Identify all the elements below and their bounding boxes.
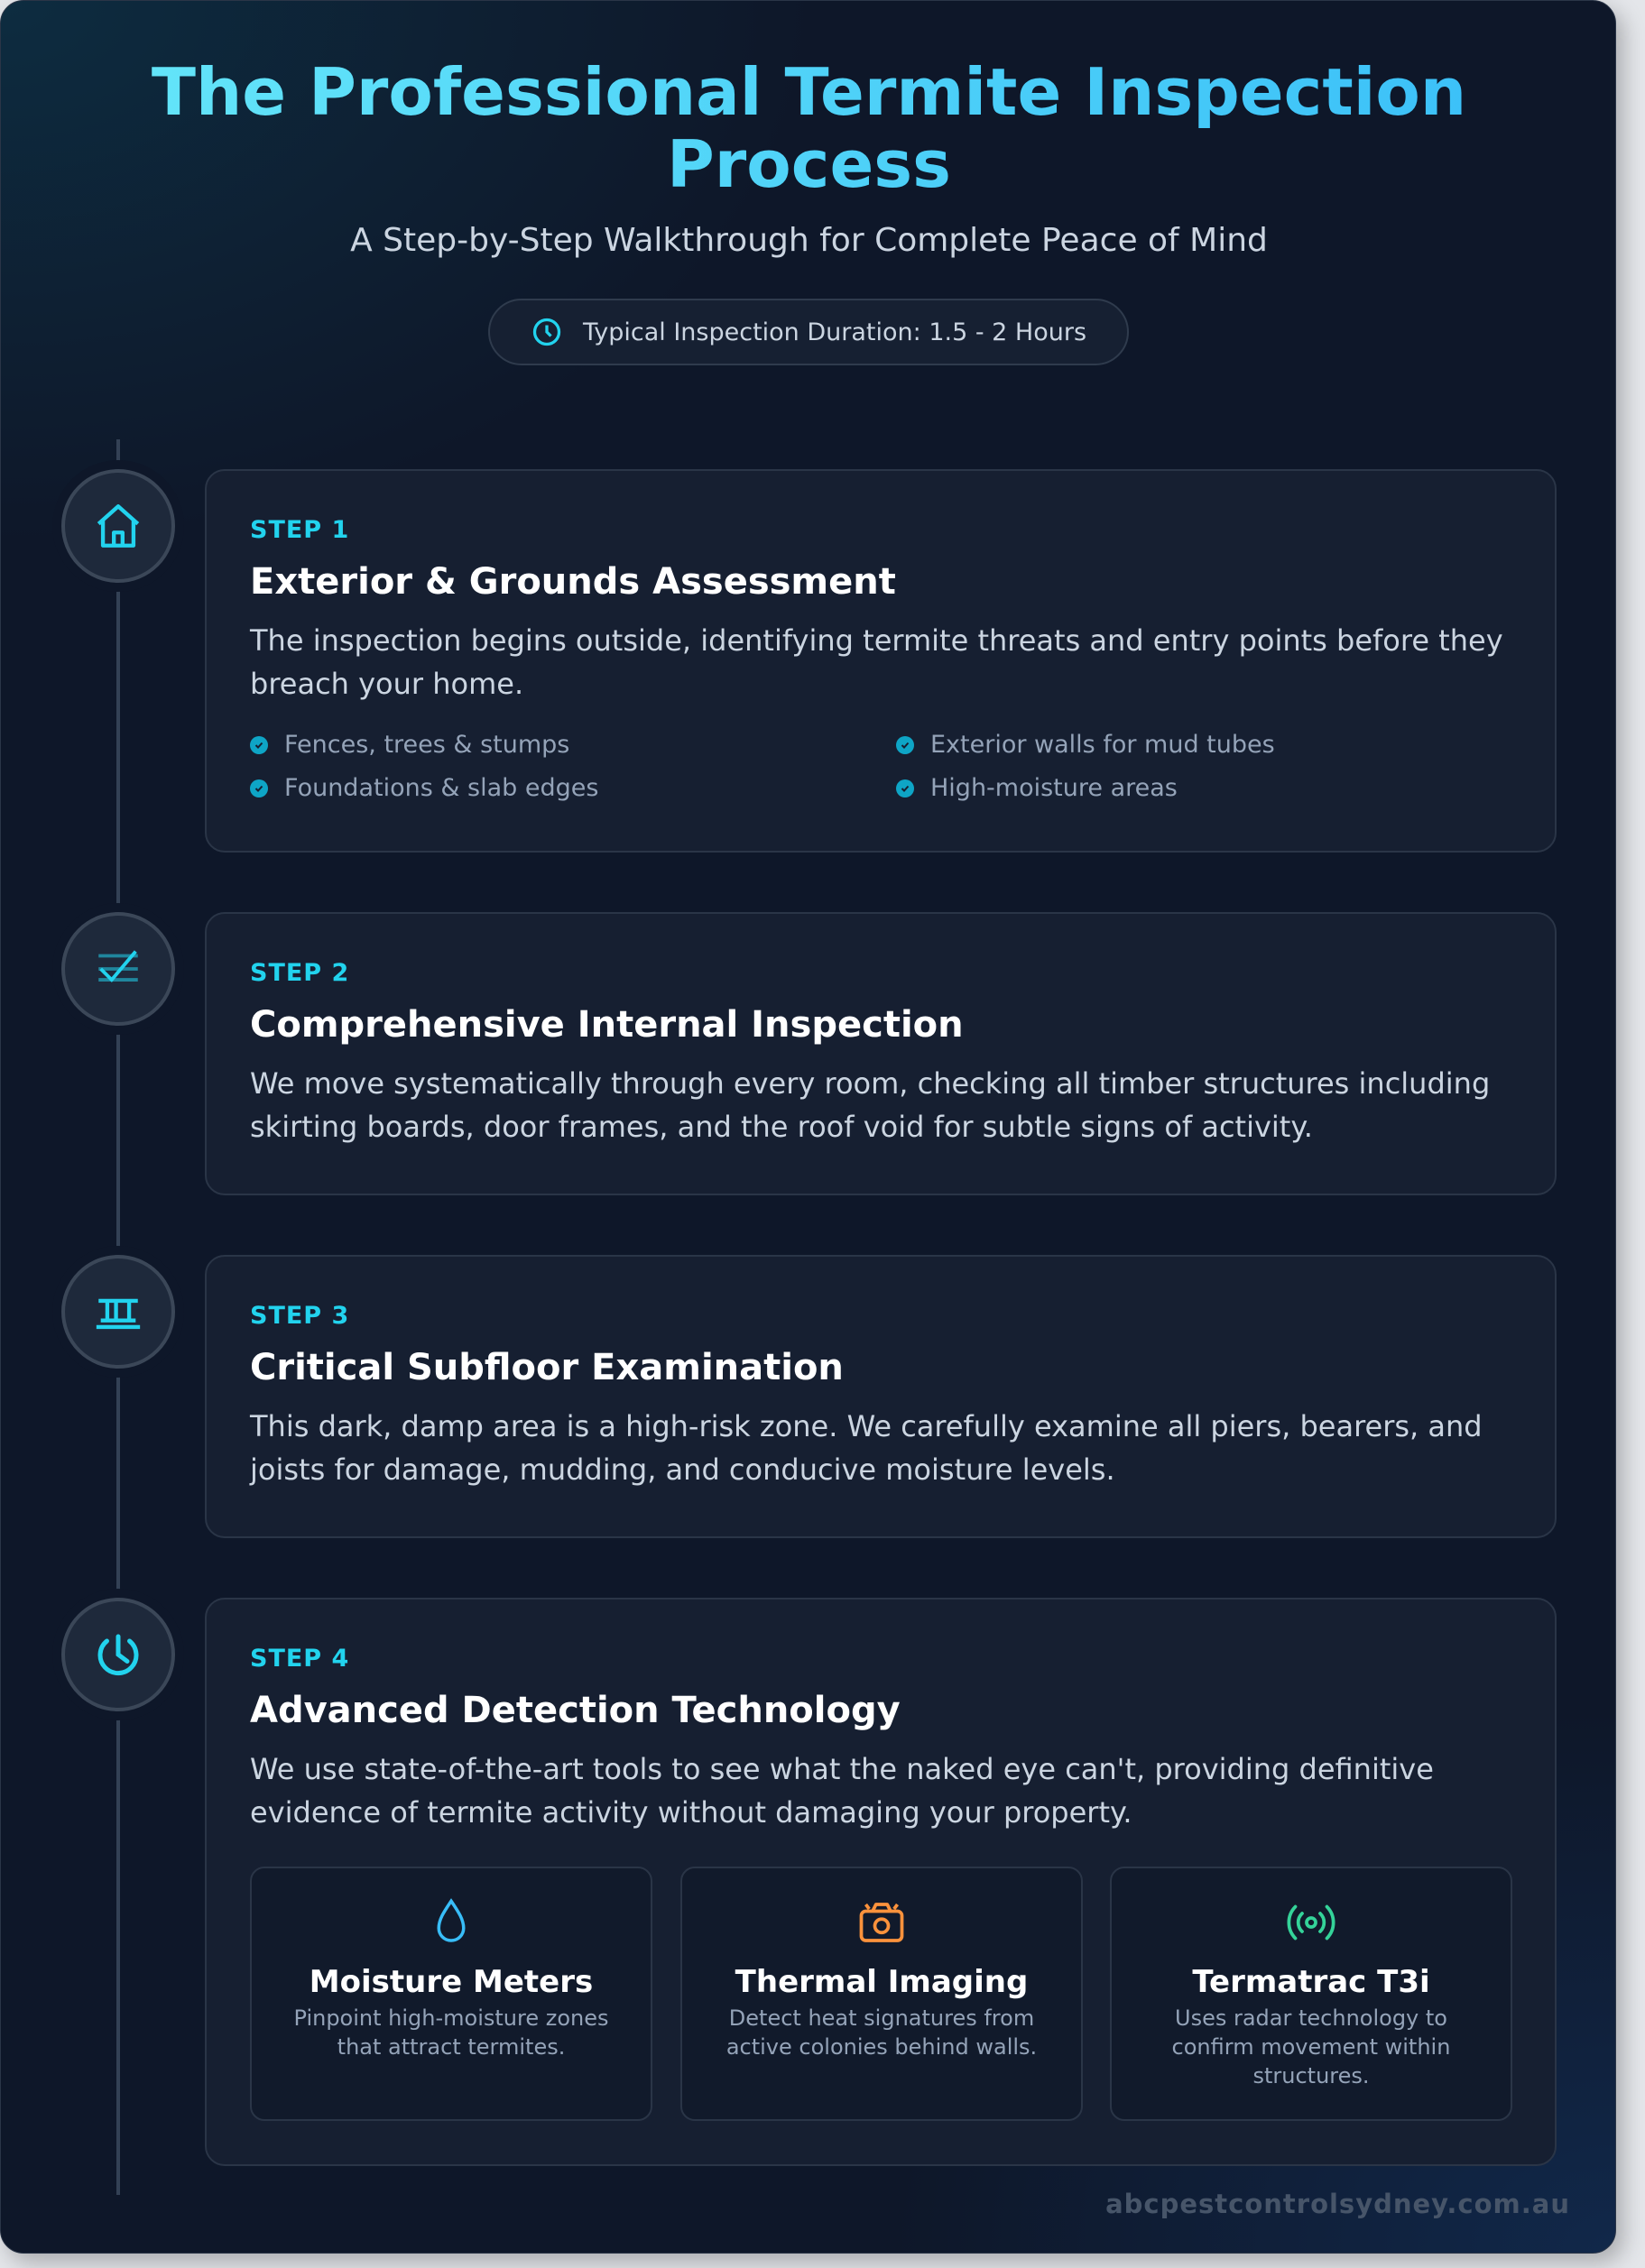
- description: The inspection begins outside, identifying termite threats and entry points before they breach your home.: [250, 623, 1503, 701]
- icon: camera: [859, 1903, 904, 1942]
- title: [1, 56, 1617, 200]
- step label: STEP 2: [250, 959, 349, 987]
- step label: STEP 4: [250, 1645, 349, 1673]
- subtitle: A Step-by-Step Walkthrough for Complete Peace of Mind: [350, 222, 1268, 259]
- icon: checklist: [61, 912, 175, 1026]
- tool: moisture meters: [250, 1867, 652, 2121]
- panel: step 2: [205, 912, 1557, 1195]
- icon: gauge: [61, 1598, 175, 1711]
- tool: termatrac: Termatrac T3i: [1192, 1964, 1430, 2000]
- panel: step 1: [205, 469, 1557, 853]
- description: We use state-of-the-art tools to see what the naked eye can't, providing definitive evidence of termite activity without damaging your property.: [250, 1752, 1434, 1830]
- heading: Advanced Detection Technology: [250, 1690, 901, 1731]
- step label: STEP 3: [250, 1302, 349, 1330]
- icon: radar: [1287, 1905, 1335, 1940]
- icon: house: [61, 469, 175, 583]
- checklist item: High-moisture areas: [930, 774, 1178, 802]
- tool: moisture meters: Moisture Meters: [310, 1964, 593, 2000]
- heading: Comprehensive Internal Inspection: [250, 1004, 964, 1046]
- step label: STEP 1: [250, 516, 349, 544]
- title: The Professional Termite Inspection: [152, 54, 1466, 130]
- tool: thermal imaging: [680, 1867, 1083, 2121]
- duration pill: Typical Inspection Duration: 1.5 - 2 Hours: [583, 318, 1086, 346]
- tool: termatrac: [1110, 1867, 1512, 2121]
- footer url: abcpestcontrolsydney.com.au: [1105, 2189, 1570, 2219]
- timeline line: [116, 439, 120, 2195]
- tool: moisture meters: Pinpoint high-moisture zones that attract termites.: [294, 2005, 608, 2060]
- duration pill: [488, 299, 1129, 365]
- checklist item: Fences, trees & stumps: [284, 731, 569, 759]
- heading: Exterior & Grounds Assessment: [250, 561, 896, 603]
- panel: step 3: [205, 1255, 1557, 1538]
- icon: subfloor: [61, 1255, 175, 1369]
- checklist item: Foundations & slab edges: [284, 774, 598, 802]
- description: This dark, damp area is a high-risk zone. We carefully examine all piers, bearers, and joists for damage, mudding, and conducive moisture levels.: [250, 1409, 1483, 1487]
- description: We move systematically through every room, checking all timber structures including skirting boards, door frames, and the roof void for subtle signs of activity.: [250, 1066, 1490, 1144]
- panel: step 4: [205, 1598, 1557, 2166]
- heading: Critical Subfloor Examination: [250, 1347, 844, 1388]
- tool: thermal imaging: Detect heat signatures from active colonies behind walls.: [726, 2005, 1037, 2060]
- tool: thermal imaging: Thermal Imaging: [735, 1964, 1028, 2000]
- icon: water drop: [437, 1898, 466, 1942]
- tool: termatrac: Uses radar technology to confirm movement within structures.: [1172, 2005, 1450, 2088]
- checklist item: Exterior walls for mud tubes: [930, 731, 1275, 759]
- title: Process: [667, 126, 951, 202]
